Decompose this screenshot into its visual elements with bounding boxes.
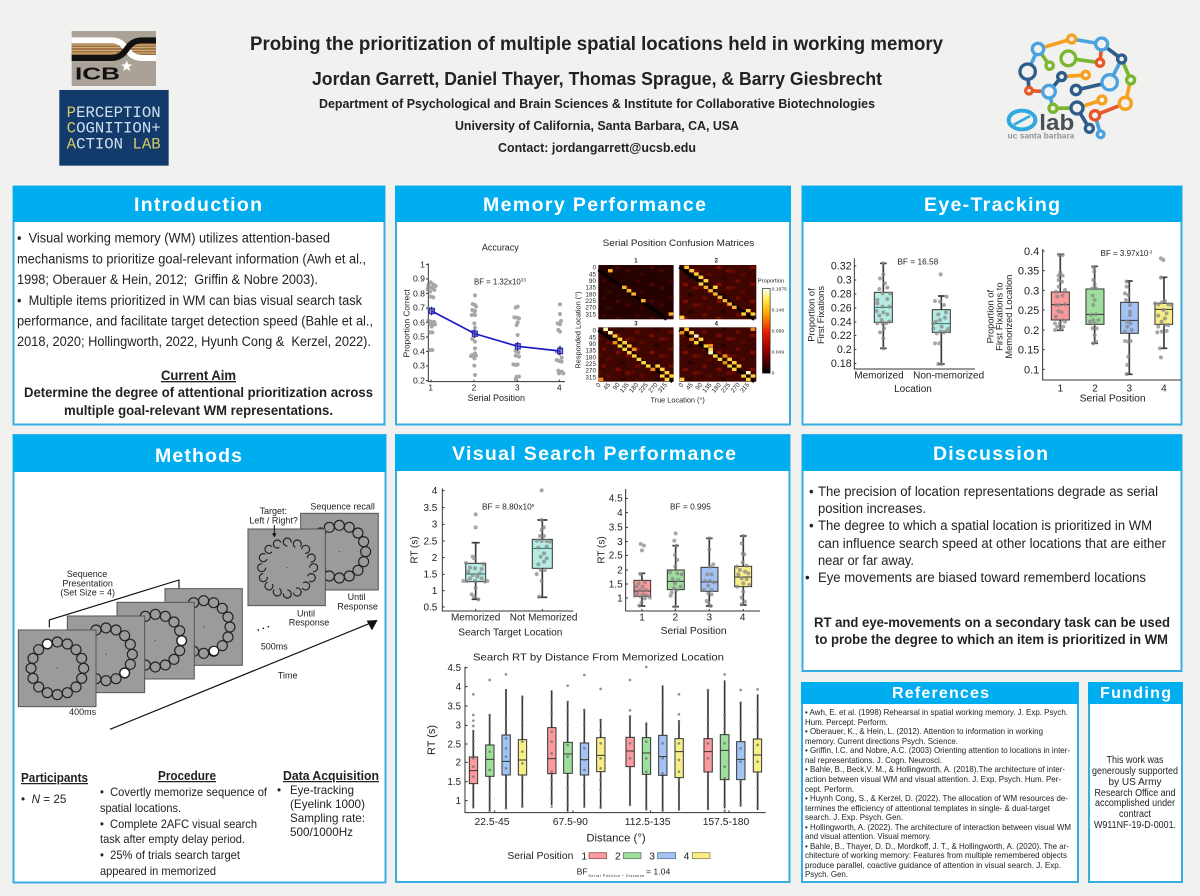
chart: first fixations to memorized location by serial position: Proportion of (985, 290, 995, 343)
panel: Memory Performance (395, 186, 791, 424)
chart: RT by serial position: 4 (617, 508, 623, 519)
chart: RT by serial position: RT (s) (596, 536, 607, 564)
text block: data acquisition: (Eyelink 1000) (290, 798, 365, 811)
chart: RT by search target location: 2 (432, 553, 438, 564)
chart: accuracy by serial position: 0.3 (413, 361, 425, 371)
callout: conclusion (814, 615, 1170, 647)
chart: proportion of first fixations by location: 0.28 (831, 289, 852, 301)
diagram labels: 400ms (69, 707, 97, 717)
text block: procedure: • Covertly memorize sequence of (100, 786, 268, 799)
chart: first fixations to memorized location by serial position (985, 246, 1181, 404)
arrow: target pointer (272, 525, 277, 537)
text block: reference list: termines the efficiency of attentional templates in single- & dual-target (805, 803, 1051, 813)
heading: Eye-Tracking (802, 186, 1182, 222)
text block: data acquisition: 500/1000Hz (290, 826, 353, 839)
heading: Memory Performance (395, 186, 791, 222)
text block: reference list: • Bahle, B., Beck,V. M., & Hollingworth, A. (2018).The architecture of inter- (805, 764, 1065, 774)
matrix 3 (598, 327, 674, 382)
chart: search RT by distance from memorized location: 4.5 (448, 663, 461, 674)
panel: Eye-Tracking (802, 186, 1182, 424)
text block: procedure: Procedure (158, 769, 216, 783)
chart: search RT by distance from memorized location: Distance (°) (586, 833, 646, 845)
chart: first fixations to memorized location by serial position: 1 (1058, 384, 1064, 395)
chart: first fixations to memorized location by serial position: 0.25 (1018, 305, 1039, 317)
text block: introduction bullets: • Visual working memory (WM) utilizes attention-based (17, 230, 330, 246)
logo: eLab brain network (1008, 35, 1135, 141)
text block: discussion bullets: The precision of location representations degrade as serial (818, 484, 1158, 499)
chart: accuracy by serial position: 33 (521, 278, 526, 283)
heading: Introduction: Introduction (134, 194, 262, 216)
panel: Introduction (13, 186, 385, 424)
logo: Perception Cognition Action Lab: PERCEPTION (67, 104, 161, 122)
text block: reference list: chitecture of working memory: Features from multiple remembered objects (805, 850, 1067, 860)
chart: proportion of first fixations by location (806, 256, 984, 395)
screen: sequence recall (301, 513, 378, 590)
chart: serial position confusion matrices: 90 (694, 381, 704, 392)
chart: serial position confusion matrices: 45 (589, 271, 596, 278)
text block: data acquisition: • (277, 784, 281, 797)
text block: reference list: • Awh, E. et al. (1998) Rehearsal in spatial working memory. J. Exp. Psych. (805, 707, 1068, 717)
chart: serial position confusion matrices: 270 (585, 305, 596, 312)
affiliation: Department of Psychological and Brain Sciences & Institute for Collaborative Biotechnologies (319, 97, 875, 111)
legend: serial position: 2 (615, 851, 621, 862)
arrow: sequence bracket (49, 580, 179, 627)
chart: serial position confusion matrices: 315 (739, 381, 751, 394)
chart: RT by search target location (409, 486, 578, 638)
chart: first fixations to memorized location by serial position: 0.35 (1018, 266, 1039, 278)
text block: procedure (100, 769, 268, 878)
chart: serial position confusion matrices: 0 (592, 265, 596, 272)
callout: current aim (24, 368, 373, 418)
text block: funding statement: W911NF-19-D-0001. (1094, 820, 1176, 831)
chart: serial position confusion matrices: 0 (678, 381, 685, 389)
screen: sequence frame 2 (67, 616, 145, 693)
heading: Memory Performance: Memory Performance (483, 194, 706, 216)
chart: accuracy by serial position: BF = 1.32x10 (474, 277, 521, 286)
text block: data acquisition: Data Acquisition (283, 769, 379, 783)
chart: search RT by distance from memorized location: 1 (456, 796, 461, 807)
text block: procedure: • Complete 2AFC visual search (100, 818, 257, 831)
screen: visual search (248, 529, 325, 606)
text block: reference list: Hum. Percept. Perform. (805, 717, 888, 727)
text block: discussion bullets: position increases. (818, 501, 926, 516)
diagram labels: Sequence (67, 569, 107, 579)
chart: serial position confusion matrices: 225 (585, 298, 596, 305)
chart: serial position confusion matrices: 315 (585, 374, 596, 381)
chart: RT by search target location: 1 (432, 586, 438, 597)
chart: RT by search target location: 4 (432, 486, 438, 497)
chart: accuracy by serial position: 4 (557, 383, 562, 393)
logo: eLab brain network: uc santa barbara (1008, 132, 1075, 141)
chart: accuracy by serial position: 1 (420, 259, 425, 269)
chart: serial position confusion matrices: True Location (°) (650, 396, 705, 405)
text block: participants (21, 771, 88, 806)
heading: Discussion (802, 435, 1182, 471)
chart: accuracy by serial position: Proportion Correct (401, 289, 411, 357)
chart: proportion of first fixations by location: BF = 16.58 (897, 256, 939, 266)
panel: Methods (13, 435, 386, 882)
chart: RT by serial position: 1.5 (609, 579, 623, 590)
heading: Funding (1088, 682, 1182, 704)
colorbar legend (758, 279, 787, 376)
text block: reference list: search. J. Exp. Psych. Gen. (805, 812, 903, 822)
chart: search RT by distance from memorized location: 67.5-90 (553, 817, 588, 828)
chart: RT by search target location: RT (s) (409, 536, 420, 564)
matrix 1 (598, 265, 674, 319)
text block: reference list: nal representations. J. Cogn. Neurosci. (805, 755, 942, 765)
chart: RT by serial position: 4 (740, 613, 746, 624)
colorbar legend: 0.1975 (772, 287, 787, 293)
chart: search RT by distance from memorized location: 3.5 (448, 701, 461, 712)
chart: first fixations to memorized location by serial position: 3 (1127, 384, 1133, 395)
chart: serial position confusion matrices: 45 (602, 381, 612, 392)
diagram: task sequence (18, 501, 378, 729)
text block: reference list: cept. Perform. (805, 784, 854, 794)
chart: accuracy by serial position: 2 (472, 383, 477, 393)
text block: introduction bullets: 1998; Oberauer & Hein, 2012; Griffin & Nobre 2003). (17, 272, 318, 287)
text block: funding statement: contract (1119, 809, 1151, 820)
text block: procedure: task after empty delay period. (100, 833, 245, 846)
text block: introduction bullets: performance, and facilitate target detection speed (Bahle et al., (17, 314, 373, 328)
chart: serial position confusion matrices: 45 (589, 334, 596, 341)
university: University of California, Santa Barbara, CA, USA (455, 119, 739, 133)
diagram labels: Response (337, 601, 378, 611)
chart: proportion of first fixations by location: Memorized (854, 371, 904, 382)
diagram labels: Time (278, 671, 297, 681)
chart: RT by serial position: 1 (639, 613, 645, 624)
heading: Methods: Methods (155, 445, 242, 467)
chart: accuracy by serial position: 0.2 (413, 375, 425, 385)
chart: RT by serial position: 2.5 (609, 551, 623, 562)
legend: serial position: 4 (684, 851, 690, 862)
logo: Perception Cognition Action Lab: COGNITION+ (67, 120, 161, 138)
chart: accuracy by serial position: 3 (515, 383, 520, 393)
chart: proportion of first fixations by location: 0.18 (831, 358, 852, 370)
text block: introduction bullets: 2018, 2020; Hollingworth, 2022, Hyunh Cong & Kerzel, 2022). (17, 334, 371, 349)
chart: RT by serial position (596, 489, 760, 637)
chart: proportion of first fixations by location: Proportion of (806, 288, 816, 342)
diagram labels: Response (289, 618, 329, 628)
chart: serial position confusion matrices: 135 (585, 348, 596, 355)
matrix 4 (679, 327, 756, 382)
callout: current aim: Current Aim (161, 368, 236, 383)
text block: funding statement: generously supported (1092, 766, 1178, 777)
chart: RT by search target location: 3 (432, 520, 438, 531)
text block: reference list: Psych. Gen. (805, 869, 848, 879)
panel: Discussion (802, 435, 1182, 671)
chart: accuracy by serial position: Accuracy (482, 242, 519, 252)
text block: discussion bullets: near or far away. (818, 553, 914, 568)
colorbar legend: 0.049 (772, 350, 784, 356)
text block: procedure: appeared in memorized (100, 865, 216, 878)
chart: RT by search target location: BF = 8.80x10 (482, 502, 532, 512)
text block: reference list: • Griffin, I.C. and Nobre, A.C. (2003) Orienting attention to locations in inter- (805, 745, 1070, 755)
chart: first fixations to memorized location by serial position: 4 (1161, 384, 1167, 395)
chart: serial position confusion matrices: 270 (585, 368, 596, 375)
legend: serial position: 3 (649, 851, 655, 862)
logo: ICB: ICB (75, 63, 120, 83)
chart: first fixations to memorized location by serial position: 0.4 (1024, 246, 1039, 258)
chart: serial position confusion matrices: 3 (634, 321, 638, 327)
text block: funding statement (1092, 755, 1178, 831)
text block: reference list: produce parallel, coactive guidance of attention in visual search. J. Exp. (805, 860, 1061, 870)
chart: RT by search target location: 9 (532, 503, 535, 508)
statistic: Bayes factor: = 1.04 (646, 866, 670, 876)
text block: reference list: and visual attention. Visual memory. (805, 831, 931, 841)
chart: proportion of first fixations by location: 0.22 (831, 330, 852, 342)
chart: first fixations to memorized location by serial position: -3 (1148, 249, 1153, 254)
logo: eLab brain network: lab (1039, 110, 1074, 135)
chart: proportion of first fixations by location: 0.3 (837, 275, 852, 287)
chart: serial position confusion matrices: 270 (730, 381, 742, 394)
text block: discussion bullets: • (809, 484, 814, 499)
statistic: Bayes factor: Serial Position * Distance (588, 874, 644, 878)
chart: serial position confusion matrices: 135 (701, 381, 714, 394)
chart: serial position confusion matrices: 180 (628, 381, 640, 394)
text block: introduction bullets: mechanisms to prioritize goal-relevant information (Awh et al., (17, 252, 366, 266)
screen: sequence frame 3 (117, 602, 194, 679)
text block: discussion bullets (805, 484, 1167, 585)
chart: first fixations to memorized location by serial position: Memorized Location (1004, 275, 1014, 359)
legend: serial position: 1 (581, 851, 587, 862)
boxes: 67.5-90 (548, 675, 605, 812)
chart: first fixations to memorized location by serial position: 0.2 (1024, 325, 1039, 337)
diagram labels: Left / Right? (249, 515, 298, 525)
legend: serial position: Serial Position (507, 851, 574, 862)
heading: Introduction (13, 186, 385, 222)
text block: reference list: • Hollingworth, A. (2022). The architecture of interaction between visual WM (805, 822, 1071, 832)
text block: discussion bullets: The degree to which a spatial location is prioritized in WM (818, 518, 1152, 533)
heading: References (801, 682, 1078, 704)
chart: RT by search target location: Search Target Location (458, 627, 562, 638)
chart: first fixations to memorized location by serial position: 0.1 (1024, 364, 1039, 376)
chart: search RT by distance from memorized location: 3 (456, 721, 461, 732)
diagram labels: Until (348, 592, 366, 602)
boxes: 112.5-135 (626, 667, 683, 811)
text block: discussion bullets: Eye movements are biased toward rememberd locations (818, 570, 1146, 585)
text block: discussion bullets: • (809, 518, 814, 533)
chart: RT by serial position: 4.5 (609, 494, 623, 505)
chart: search RT by distance from memorized location: 1.5 (448, 777, 461, 788)
chart: proportion of first fixations by location: First Fixations (816, 286, 826, 344)
colorbar legend: 0.099 (772, 329, 784, 335)
chart: serial position confusion matrices: 0 (595, 381, 603, 389)
chart: serial position confusion matrices: Responded Location (°) (573, 291, 582, 369)
contact: Contact: jordangarrett@ucsb.edu (498, 141, 696, 155)
chart: proportion of first fixations by location: Non-memorized (913, 371, 984, 382)
panel: Funding (1088, 682, 1182, 882)
chart: accuracy by serial position: 0.8 (413, 288, 425, 298)
heading: Funding: Funding (1100, 685, 1171, 702)
boxes: 157.5-180 (704, 674, 762, 811)
ellipsis (258, 627, 268, 630)
diagram labels: Until (297, 608, 315, 618)
chart: RT by serial position: 2 (673, 613, 679, 624)
text block: procedure: spatial locations. (100, 802, 181, 815)
diagram labels: (Set Size = 4) (60, 588, 115, 598)
chart: first fixations to memorized location by serial position: 2 (1092, 384, 1098, 395)
chart: RT by search target location: 0.5 (423, 602, 438, 613)
text block: reference list: • Huynh Cong, S., & Kerzel, D. (2022). The allocation of WM resources de- (805, 793, 1068, 803)
chart: serial position confusion matrices: 225 (638, 381, 650, 394)
colorbar legend: Proportion (758, 279, 784, 285)
chart: serial position confusion matrices: 2 (715, 258, 719, 264)
colorbar legend: 0.148 (772, 308, 784, 314)
chart: RT by search target location: 1.5 (423, 570, 438, 581)
text block: discussion bullets: • (805, 570, 810, 585)
panel: Visual Search Performance (395, 435, 790, 882)
chart: RT by search target location: 3.5 (423, 503, 438, 514)
chart: serial position confusion matrices: 225 (720, 381, 732, 394)
legend: serial position (507, 851, 710, 862)
chart: search RT by distance from memorized location: 157.5-180 (703, 817, 749, 828)
heading: Eye-Tracking: Eye-Tracking (924, 194, 1060, 216)
chart: serial position confusion matrices: 4 (715, 321, 719, 327)
callout: current aim: multiple goal-relevant WM representations. (64, 403, 333, 418)
chart: serial position confusion matrices: 180 (585, 291, 596, 298)
title: Probing the prioritization of multiple spatial locations held in working memory (250, 34, 943, 55)
chart: proportion of first fixations by location: 0.2 (837, 344, 852, 356)
authors: Jordan Garrett, Daniel Thayer, Thomas Sprague, & Barry Giesbrecht (312, 69, 882, 89)
text block: reference list: memory. Current directions Psych. Science. (805, 736, 958, 746)
chart: serial position confusion matrices: 45 (685, 381, 695, 392)
text block: reference list: • Oberauer, K., & Hein, L. (2012). Attention to information in working (805, 726, 1043, 736)
chart: proportion of first fixations by location: 0.24 (831, 317, 852, 329)
heading: Discussion: Discussion (933, 443, 1048, 465)
chart: serial position confusion matrices: 180 (711, 381, 723, 394)
chart: RT by serial position: 3 (617, 537, 623, 548)
logo: Perception Cognition Action Lab: ACTION LAB (67, 135, 161, 153)
chart: RT by search target location: Not Memorized (510, 612, 578, 623)
heading: Visual Search Performance: Visual Search Performance (452, 443, 736, 465)
text block: data acquisition: Sampling rate: (290, 812, 365, 825)
text block: reference list: • Bahle, B., Thayer, D. D., Mordkoff, J. T., & Hollingworth, A. (2020). The ar- (805, 841, 1069, 851)
chart: RT by serial position: 3.5 (609, 523, 623, 534)
callout: current aim: Determine the degree of attentional prioritization across (24, 385, 373, 400)
chart: serial position confusion matrices: 90 (589, 341, 596, 348)
chart: serial position confusion matrices: 90 (589, 278, 596, 285)
text block: participants: Participants (21, 771, 88, 785)
text block: data acquisition (277, 769, 379, 839)
statistic: Bayes factor (577, 866, 670, 878)
chart: proportion of first fixations by location: 0.32 (831, 261, 852, 273)
diagram labels: Target: (260, 506, 287, 516)
heading: References: References (892, 685, 989, 702)
text block: procedure: • 25% of trials search target (100, 849, 241, 862)
text block: reference list (805, 707, 1071, 879)
chart: RT by serial position: Serial Position (661, 626, 727, 637)
screen: sequence frame 4 (165, 589, 242, 665)
chart: accuracy by serial position (401, 242, 565, 403)
text block: discussion bullets: can influence search speed at other locations that are either (818, 536, 1167, 551)
chart: proportion of first fixations by location: Location (894, 384, 932, 395)
heading: Visual Search Performance (395, 435, 790, 471)
chart: search RT by distance from memorized location: 22.5-45 (474, 817, 510, 828)
chart: serial position confusion matrices: 225 (585, 361, 596, 368)
chart: search RT by distance from memorized location (426, 653, 766, 878)
screen: sequence frame 1 (18, 630, 96, 707)
chart: serial position confusion matrices: 90 (612, 381, 622, 392)
chart: proportion of first fixations by location: 0.26 (831, 303, 852, 315)
chart: serial position confusion matrices: 0 (592, 328, 596, 335)
panel: References (801, 682, 1078, 882)
diagram labels (60, 501, 378, 717)
chart: serial position confusion matrices: 315 (657, 381, 669, 394)
chart: first fixations to memorized location by serial position: 0.15 (1018, 345, 1039, 357)
chart: serial position confusion matrices: 180 (585, 354, 596, 361)
chart: RT by search target location: Memorized (451, 612, 500, 623)
statistic: Bayes factor: BF (577, 866, 588, 876)
chart: accuracy by serial position: 1 (428, 383, 433, 393)
chart: accuracy by serial position: 0.7 (413, 303, 425, 313)
text block: funding statement: accomplished under (1095, 798, 1176, 809)
heading: Methods (13, 435, 386, 472)
text block: funding statement: by US Army (1108, 777, 1162, 788)
chart: accuracy by serial position: 0.4 (413, 346, 425, 356)
chart: RT by serial position: BF = 0.995 (670, 502, 711, 512)
logo: ICB (72, 31, 156, 86)
poster title block (250, 34, 943, 158)
callout: conclusion: RT and eye-movements on a secondary task can be used (814, 615, 1170, 630)
callout: conclusion: to probe the degree to which an item is prioritized in WM (815, 632, 1168, 647)
chart: first fixations to memorized location by serial position: First Fixations to (994, 282, 1004, 351)
chart: RT by serial position: 1 (617, 593, 623, 604)
text block: funding statement: Research Office and (1094, 788, 1176, 799)
chart: search RT by distance from memorized location: 2.5 (448, 739, 461, 750)
boxes: 22.5-45 (469, 674, 527, 811)
text block: introduction bullets: • Multiple items prioritized in WM can bias visual search task (17, 293, 362, 308)
chart: first fixations to memorized location by serial position: 0.3 (1024, 285, 1039, 297)
text block: reference list: action between visual WM and visual attention. J. Exp. Psych. Hum. Per- (805, 774, 1061, 784)
chart: serial position confusion matrices: 270 (647, 381, 660, 394)
chart: serial position confusion matrices: 135 (619, 381, 631, 394)
chart: serial position confusion matrices: 1 (634, 258, 638, 264)
chart: search RT by distance from memorized location: 112.5-135 (625, 817, 671, 828)
chart: accuracy by serial position: 0.9 (413, 274, 425, 284)
text block: data acquisition: Eye-tracking (290, 784, 354, 797)
chart: serial position confusion matrices: Serial Position Confusion Matrices (603, 238, 755, 248)
chart: serial position confusion matrices: 315 (585, 311, 596, 318)
text block: participants: • N = 25 (21, 793, 67, 806)
chart: search RT by distance from memorized location: Search RT by Distance From Memorized Location (473, 653, 724, 664)
chart: search RT by distance from memorized location: 4 (456, 682, 462, 693)
chart: serial position confusion matrices (573, 238, 787, 405)
text block: funding statement: This work was (1106, 755, 1164, 766)
chart: first fixations to memorized location by serial position: BF = 3.97x10 (1101, 249, 1148, 258)
diagram labels: Sequence recall (310, 501, 375, 511)
chart: accuracy by serial position: Serial Position (468, 393, 525, 403)
diagram labels: 500ms (261, 641, 288, 651)
chart: RT by search target location: 2.5 (423, 536, 438, 547)
diagram labels: Presentation (62, 578, 113, 588)
matrix 2 (679, 265, 756, 319)
chart: serial position confusion matrices: 135 (585, 285, 596, 292)
chart: search RT by distance from memorized location: 2 (456, 758, 461, 769)
logo: Perception Cognition Action Lab (59, 90, 169, 166)
chart: search RT by distance from memorized location: RT (s) (426, 725, 438, 755)
text block: introduction bullets (17, 230, 373, 349)
arrow: time (110, 620, 378, 729)
chart: accuracy by serial position: 0.6 (413, 317, 425, 327)
chart: accuracy by serial position: 0.5 (413, 332, 425, 342)
colorbar legend: 0 (772, 370, 775, 376)
chart: first fixations to memorized location by serial position: Serial Position (1080, 393, 1146, 404)
chart: RT by serial position: 2 (617, 565, 623, 576)
chart: RT by serial position: 3 (707, 613, 713, 624)
